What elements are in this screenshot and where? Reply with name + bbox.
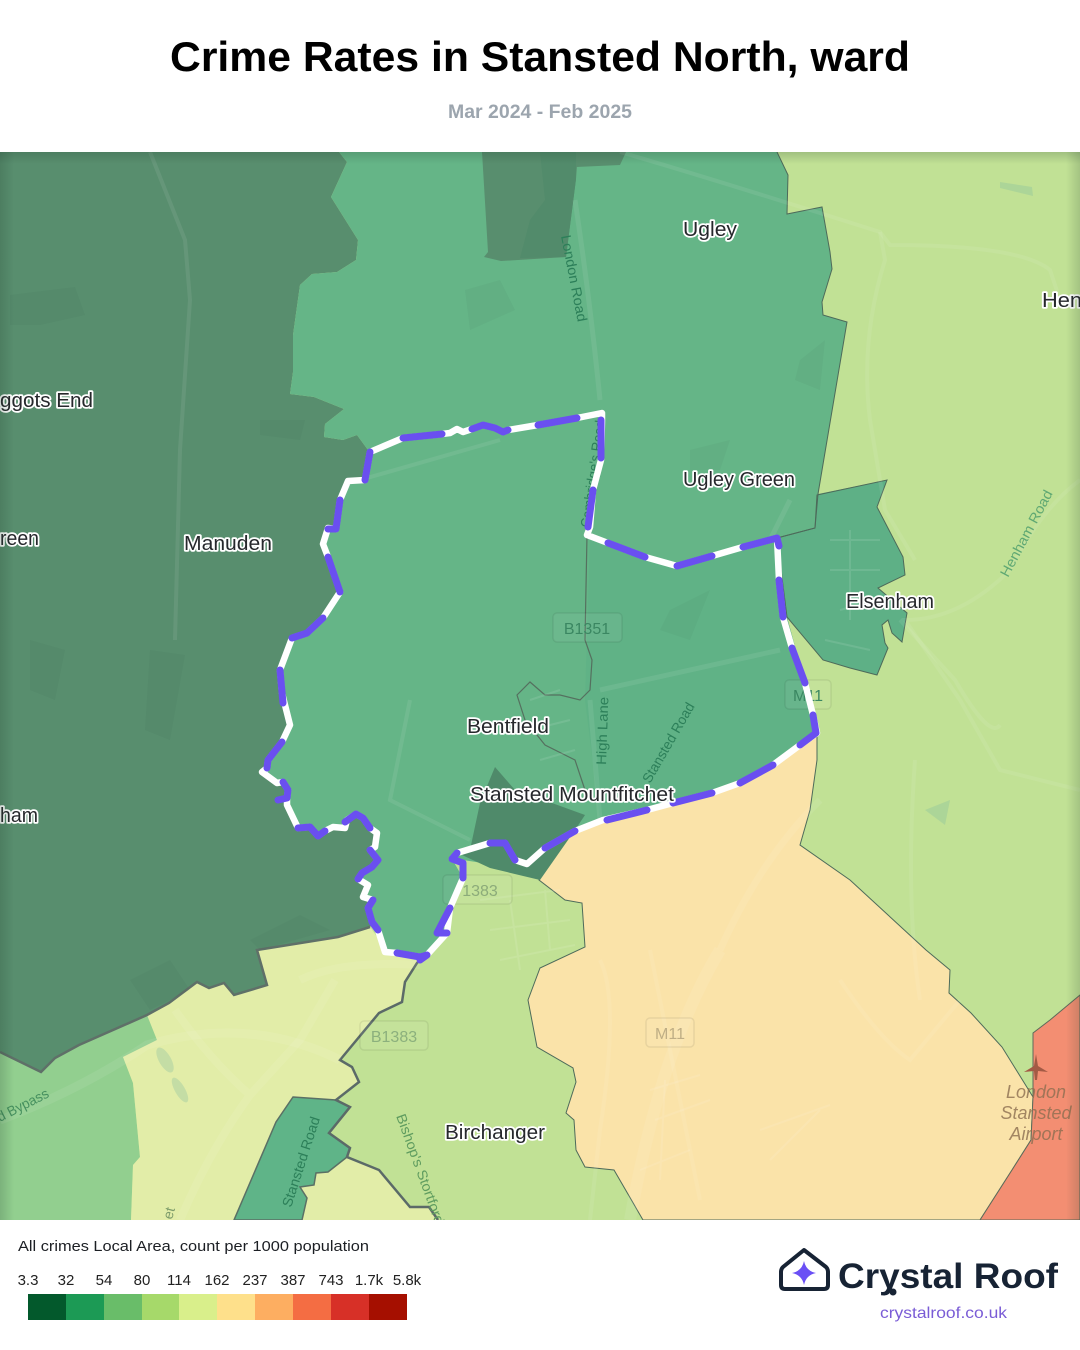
place label: London Stansted Airport <box>1000 1082 1073 1144</box>
road label: Henham Road: Henham Road <box>997 487 1056 579</box>
legend tick labels: 80 <box>134 1272 150 1289</box>
map region boundary: south thick line <box>329 955 438 1220</box>
place label: Manuden: Manuden <box>184 533 272 555</box>
place label: London Stansted Airport: London <box>1006 1082 1066 1102</box>
road shield: B1383 south <box>360 1021 428 1050</box>
choropleth map <box>0 152 1080 1226</box>
place label: ham fragment: ham <box>0 805 38 827</box>
icon: airport plane <box>1024 1054 1048 1080</box>
road label: street fragment: et <box>159 1205 178 1221</box>
place label: Henham fragment: Hen <box>1042 290 1080 312</box>
map region: dark patch north <box>482 152 578 261</box>
road shield: M11 south: M11 <box>655 1026 685 1043</box>
map vignette: left edge <box>0 152 14 1220</box>
road shield: B1383 north <box>443 875 512 904</box>
map region: south-west mid green <box>0 1010 157 1220</box>
place label: Green fragment: reen <box>0 528 39 550</box>
map region: light green base <box>123 152 1080 1220</box>
ward boundary: purple dashes <box>267 418 816 960</box>
map region: Stansted Road green patch <box>234 1097 350 1220</box>
map region: dark patch north inner <box>566 180 576 256</box>
road shield: M11 north: M11 <box>793 688 823 705</box>
map water features <box>153 182 1033 1105</box>
road label: Bishop's Stortford: Bishop's Stortford <box>393 1112 448 1226</box>
map roads <box>148 152 960 1212</box>
subtitle: date range: Mar 2024 - Feb 2025 <box>448 102 632 123</box>
map region: orange airport-side area <box>528 733 1033 1220</box>
road shield: B1351 <box>553 613 622 642</box>
logo wordmark: Crystal Roof <box>838 1257 1058 1296</box>
place label: Ugley: Ugley <box>683 219 737 241</box>
map region: Elsenham <box>777 480 907 675</box>
legend tick labels: 32 <box>58 1272 74 1289</box>
map region: pale yellow west of Birchanger <box>123 927 438 1220</box>
road label: High Lane: High Lane <box>593 696 611 765</box>
map field patches <box>10 280 825 1010</box>
legend tick labels: 114 <box>167 1272 191 1289</box>
title: Crime Rates in Stansted North, ward <box>170 33 910 80</box>
road shield: B1351: B1351 <box>564 621 610 638</box>
map region: dark sliver north <box>576 152 626 167</box>
map vignette: right edge <box>1066 152 1080 1220</box>
map region boundary: central district lines <box>517 535 592 790</box>
place label: London Stansted Airport: Airport <box>1008 1124 1064 1144</box>
place label: Stansted Mountfitchet: Stansted Mountfitchet <box>470 784 674 806</box>
map region: red airport area <box>980 995 1080 1220</box>
map region: dark green west <box>0 152 374 1070</box>
place label: Biggots End fragment: ggots End <box>0 390 93 412</box>
legend tick labels: 5.8k <box>393 1272 422 1289</box>
road label: Cambridge Road: Cambridge's Road <box>577 419 608 528</box>
road label: London Road: London Road <box>558 234 591 323</box>
map region: dark Stansted Mountfitchet patch <box>462 767 585 880</box>
road label: Stansted Road east: Stansted Road <box>639 700 698 786</box>
map region: slightly darker east ward and Ugley <box>787 618 795 646</box>
place label: Bentfield: Bentfield <box>467 716 549 738</box>
legend tick labels: 1.7k <box>355 1272 384 1289</box>
logo: Crystal Roof <box>781 1250 1058 1322</box>
legend tick labels: 162 <box>204 1272 230 1289</box>
icon: house outline <box>781 1250 828 1289</box>
map vignette: top edge <box>0 152 1080 164</box>
road label: Stansted Road south: Stansted Road <box>279 1115 323 1209</box>
place label: Elsenham: Elsenham <box>846 591 934 613</box>
logo url: crystalroof.co.uk <box>880 1305 1008 1322</box>
legend tick labels: 743 <box>318 1272 344 1289</box>
legend tick labels <box>18 1272 422 1289</box>
logo keyhole dot on descender <box>890 1288 896 1296</box>
legend tick labels: 3.3 <box>18 1272 38 1289</box>
road shield: B1383 south: B1383 <box>371 1029 417 1046</box>
legend tick labels: 237 <box>242 1272 268 1289</box>
ward boundary: white base line <box>262 413 817 957</box>
road shield: M11 north <box>785 680 831 709</box>
legend colour scale <box>28 1294 407 1320</box>
road shield: M11 south <box>646 1018 694 1047</box>
map roads: housing estate texture <box>480 530 880 970</box>
place label: Ugley Green: Ugley Green <box>683 469 795 491</box>
map region: mid green north and ward <box>262 152 907 955</box>
map region boundary: Ugley east edge <box>777 152 847 538</box>
legend title: All crimes Local Area, count per 1000 population <box>18 1238 369 1255</box>
legend tick labels: 54 <box>96 1272 112 1289</box>
road shield: B1383 north: 1383 <box>462 883 498 900</box>
place label: Birchanger: Birchanger <box>445 1122 545 1144</box>
place label: London Stansted Airport: Stansted <box>1000 1103 1073 1123</box>
map region boundary line: dark to light <box>0 927 370 1072</box>
legend tick labels: 387 <box>280 1272 306 1289</box>
legend <box>18 1238 422 1320</box>
icon: star <box>792 1261 816 1285</box>
